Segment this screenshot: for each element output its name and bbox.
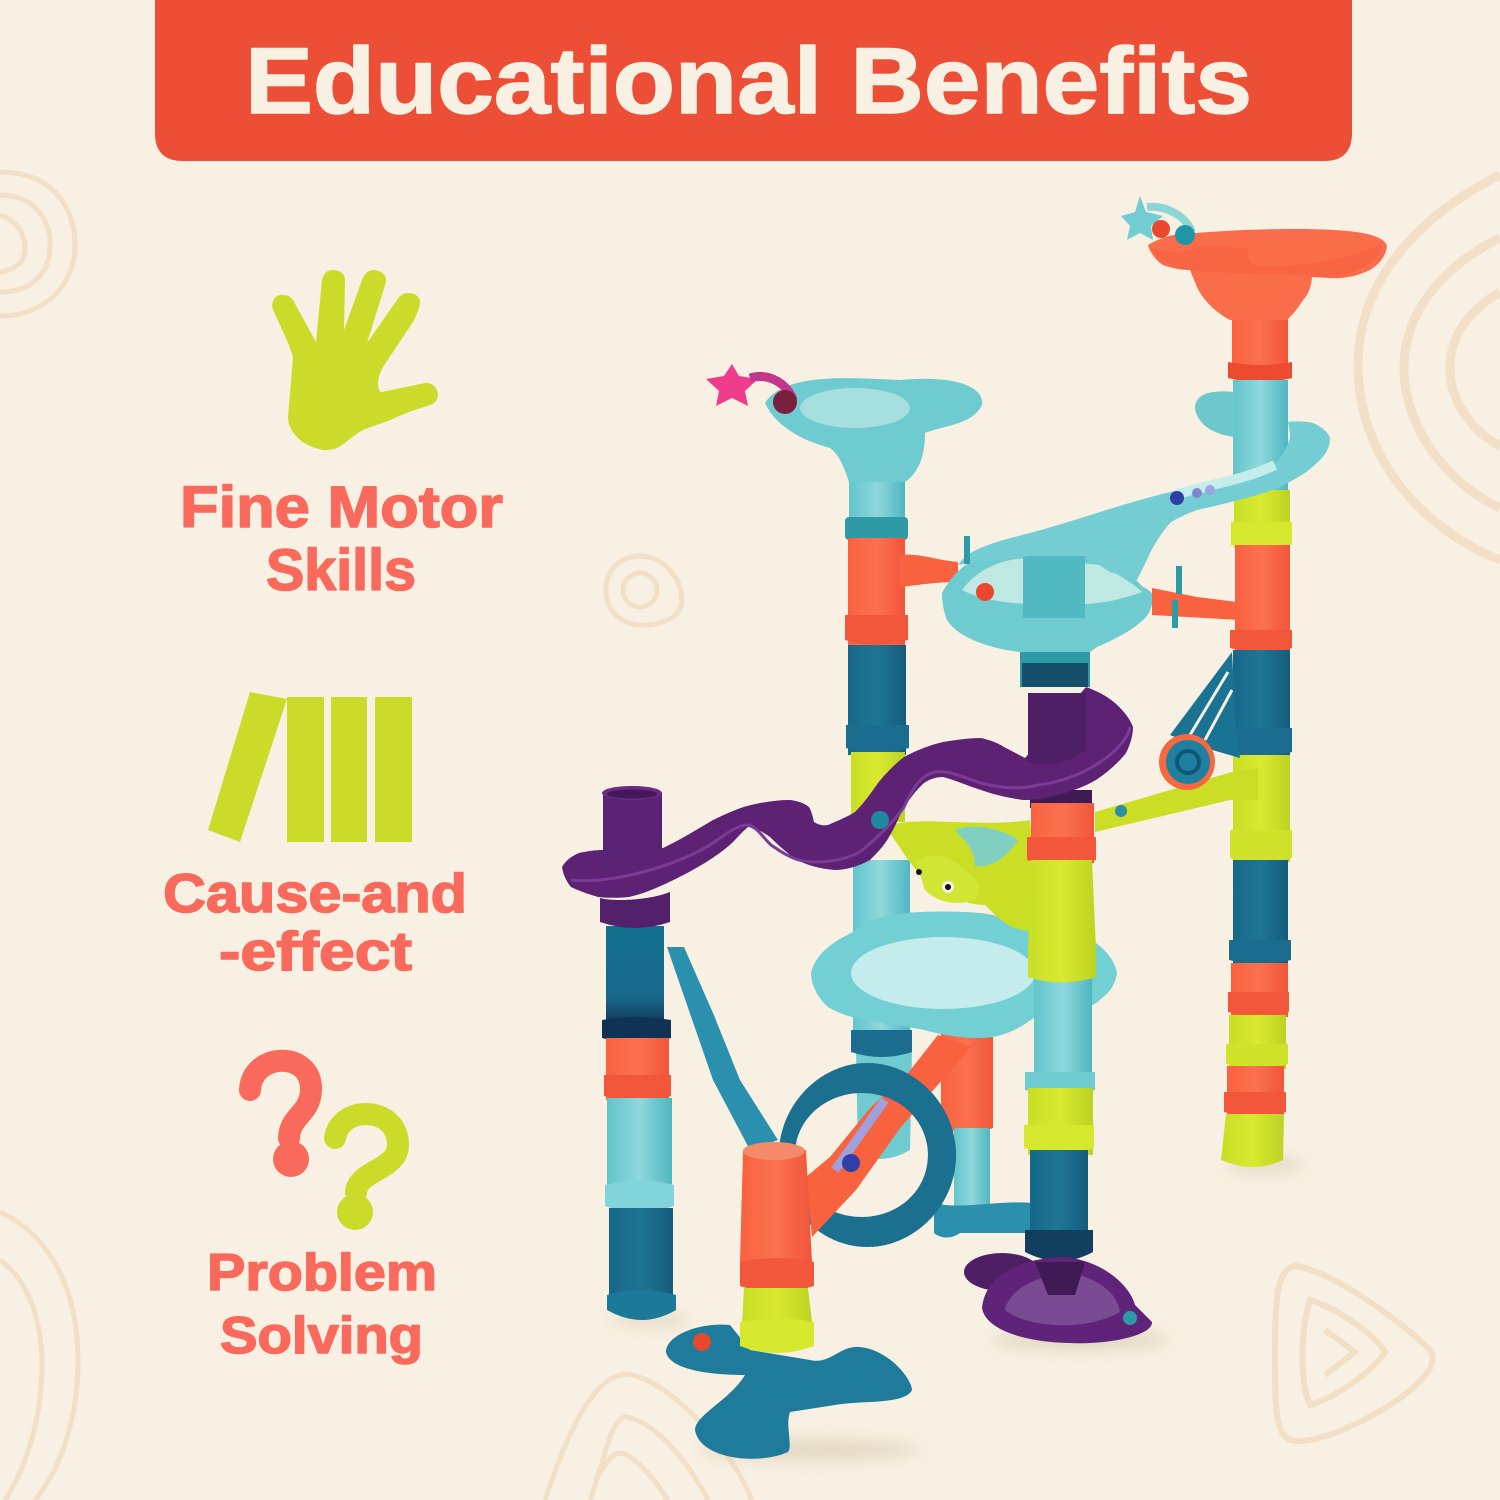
purple wavy ramp [562,687,1133,898]
aqua funnel with star [765,378,982,482]
marble run toy [562,196,1387,1460]
label [207,1244,437,1365]
icon: pink star [706,364,758,406]
label: Fine Motor [180,475,503,540]
label: Solving [220,1307,423,1365]
ramp front rim [571,727,1130,881]
teal clover base [666,1325,912,1459]
purple tube centre [1028,693,1086,764]
teal loop [779,1063,956,1247]
benefit: fine motor skills [180,270,503,603]
benefit: cause-and-effect [163,692,467,982]
middle left tower [706,364,982,822]
label: Skills [266,538,416,603]
icon: question marks [250,1061,398,1230]
teal chute left [667,947,778,1150]
title: Educational Benefits [245,28,1252,133]
centre column [1024,790,1096,1261]
dark fan and snail wheel [1159,652,1240,790]
title banner [155,0,1352,161]
centre bowl [942,537,1153,687]
top orange funnel [1121,196,1387,320]
icon: books [208,692,412,842]
aqua spiral ramp [958,421,1330,628]
benefit: problem solving [207,1061,437,1365]
aqua dish [811,912,1117,1038]
left tower [600,892,676,1320]
label [163,862,467,982]
label: Cause-and [163,862,467,924]
front post [740,1142,814,1353]
soft ground shadows [610,1158,1305,1460]
label: -effect [219,920,412,982]
lime splash and frog [885,820,1040,931]
label [180,475,503,603]
right tower [1195,305,1292,1167]
icon: blue star [1121,196,1163,240]
loop front part [872,1063,956,1247]
dish highlight [851,937,1035,1009]
label: Problem [207,1244,437,1302]
purple tube left [603,793,662,875]
purple spiral base [964,1253,1152,1343]
back tubes below dish [851,860,1032,1238]
icon: hand [272,270,438,450]
lime ramp to centre column [1095,768,1258,832]
orange chute with marble [806,1035,971,1237]
